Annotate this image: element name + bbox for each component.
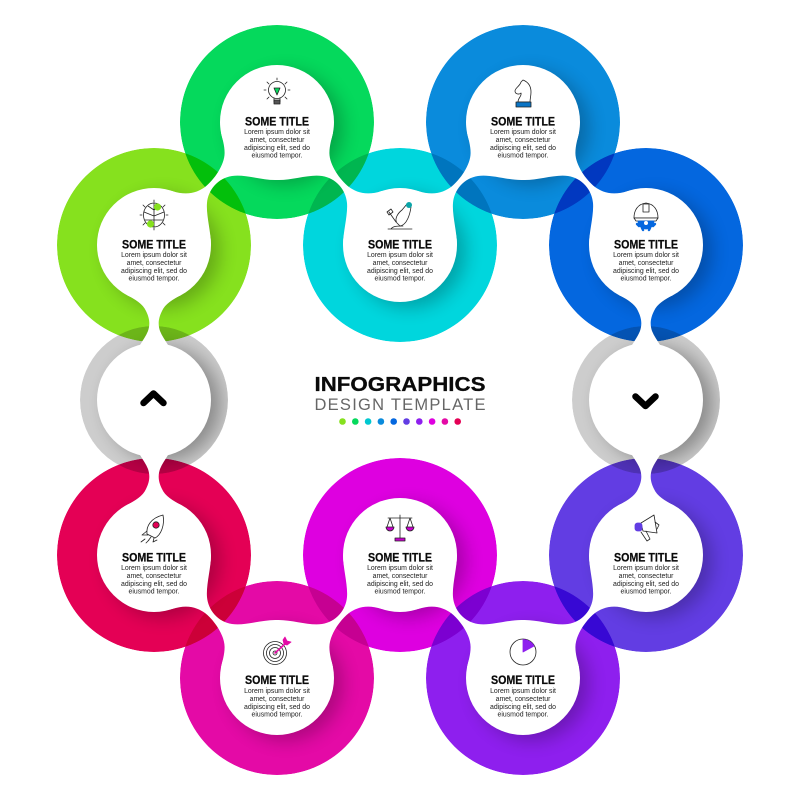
body text: adipiscing elit, sed do: [613, 581, 679, 588]
icon: chess knight: [515, 80, 531, 107]
body text: Lorem ipsum dolor sit: [121, 252, 187, 259]
step: cyan, microscope: [367, 202, 433, 282]
step: crimson, rocket: [121, 515, 187, 596]
body text: amet, consectetur: [619, 260, 674, 267]
step: pink, target: [244, 637, 310, 718]
body text: adipiscing elit, sed do: [367, 581, 433, 588]
body text: eiusmod tempor.: [129, 588, 180, 596]
body text: eiusmod tempor.: [375, 276, 426, 282]
icon: brain: [140, 200, 168, 230]
step: purple, clock: [490, 639, 556, 718]
white channel: circles and necks cut through all rings: [97, 65, 703, 735]
heading: [314, 373, 486, 425]
title: SOME TITLE: [122, 237, 186, 251]
title: SOME TITLE: [245, 673, 309, 687]
title: SOME TITLE: [368, 237, 432, 251]
title: SOME TITLE: [368, 550, 432, 564]
title: SOME TITLE: [245, 114, 309, 128]
body text: adipiscing elit, sed do: [244, 704, 310, 711]
ring: grey connector left: [80, 326, 228, 474]
body text: amet, consectetur: [373, 573, 428, 580]
body text: Lorem ipsum dolor sit: [490, 688, 556, 695]
title: SOME TITLE: [614, 550, 678, 564]
icon: clock: [510, 639, 536, 665]
icon: helmet and gear: [634, 203, 658, 230]
icon: lightbulb: [264, 78, 290, 104]
body text: eiusmod tempor.: [129, 276, 180, 282]
body text: adipiscing elit, sed do: [367, 268, 433, 275]
body text: eiusmod tempor.: [498, 152, 549, 160]
body text: eiusmod tempor.: [498, 712, 549, 718]
body text: eiusmod tempor.: [375, 588, 426, 596]
body text: amet, consectetur: [127, 573, 182, 580]
ring: royal blue: [549, 148, 743, 342]
body text: Lorem ipsum dolor sit: [244, 129, 310, 136]
body text: amet, consectetur: [250, 696, 305, 703]
title: SOME TITLE: [614, 237, 678, 251]
ring: cyan: [303, 148, 497, 342]
body text: amet, consectetur: [496, 137, 551, 144]
icon: rocket: [141, 515, 164, 543]
step: violet, megaphone: [613, 515, 679, 596]
body text: Lorem ipsum dolor sit: [367, 252, 433, 259]
ring: pink: [180, 581, 374, 775]
title: SOME TITLE: [491, 673, 555, 687]
body text: adipiscing elit, sed do: [121, 268, 187, 275]
body text: Lorem ipsum dolor sit: [613, 252, 679, 259]
body text: amet, consectetur: [373, 260, 428, 267]
body text: amet, consectetur: [250, 137, 305, 144]
body text: Lorem ipsum dolor sit: [490, 129, 556, 136]
title: SOME TITLE: [491, 114, 555, 128]
ring: violet: [549, 458, 743, 652]
ring: lime: [57, 148, 251, 342]
ring: magenta: [303, 458, 497, 652]
ring: green: [180, 25, 374, 219]
body text: amet, consectetur: [496, 696, 551, 703]
step: magenta, scales: [367, 515, 433, 596]
icon: target: [264, 637, 291, 664]
body text: adipiscing elit, sed do: [121, 581, 187, 588]
icon: megaphone: [635, 515, 659, 541]
body text: eiusmod tempor.: [621, 588, 672, 596]
colour dots: [339, 418, 461, 425]
ring: crimson: [57, 458, 251, 652]
body text: amet, consectetur: [619, 573, 674, 580]
ring: blue: [426, 25, 620, 219]
step: blue, chess knight: [490, 80, 556, 160]
body text: eiusmod tempor.: [621, 276, 672, 282]
arrow: chevron up: [144, 394, 164, 403]
icon: microscope: [387, 202, 412, 229]
step: green, lightbulb: [244, 78, 310, 160]
icon: scales: [386, 515, 414, 541]
body text: adipiscing elit, sed do: [490, 145, 556, 152]
heading line 1: INFOGRAPHICS: [314, 373, 486, 396]
ring: purple: [426, 581, 620, 775]
heading line 2: DESIGN TEMPLATE: [314, 396, 486, 414]
step: lime, brain: [121, 200, 187, 282]
body text: amet, consectetur: [127, 260, 182, 267]
arrow: chevron down: [636, 396, 656, 406]
body text: eiusmod tempor.: [252, 712, 303, 718]
body text: Lorem ipsum dolor sit: [367, 565, 433, 572]
body text: Lorem ipsum dolor sit: [613, 565, 679, 572]
body text: eiusmod tempor.: [252, 152, 303, 160]
title: SOME TITLE: [122, 550, 186, 564]
step: royal blue, helmet and gear: [613, 203, 679, 282]
body text: Lorem ipsum dolor sit: [121, 565, 187, 572]
ring: grey connector right: [572, 326, 720, 474]
body text: Lorem ipsum dolor sit: [244, 688, 310, 695]
body text: adipiscing elit, sed do: [613, 268, 679, 275]
body text: adipiscing elit, sed do: [244, 145, 310, 152]
body text: adipiscing elit, sed do: [490, 704, 556, 711]
